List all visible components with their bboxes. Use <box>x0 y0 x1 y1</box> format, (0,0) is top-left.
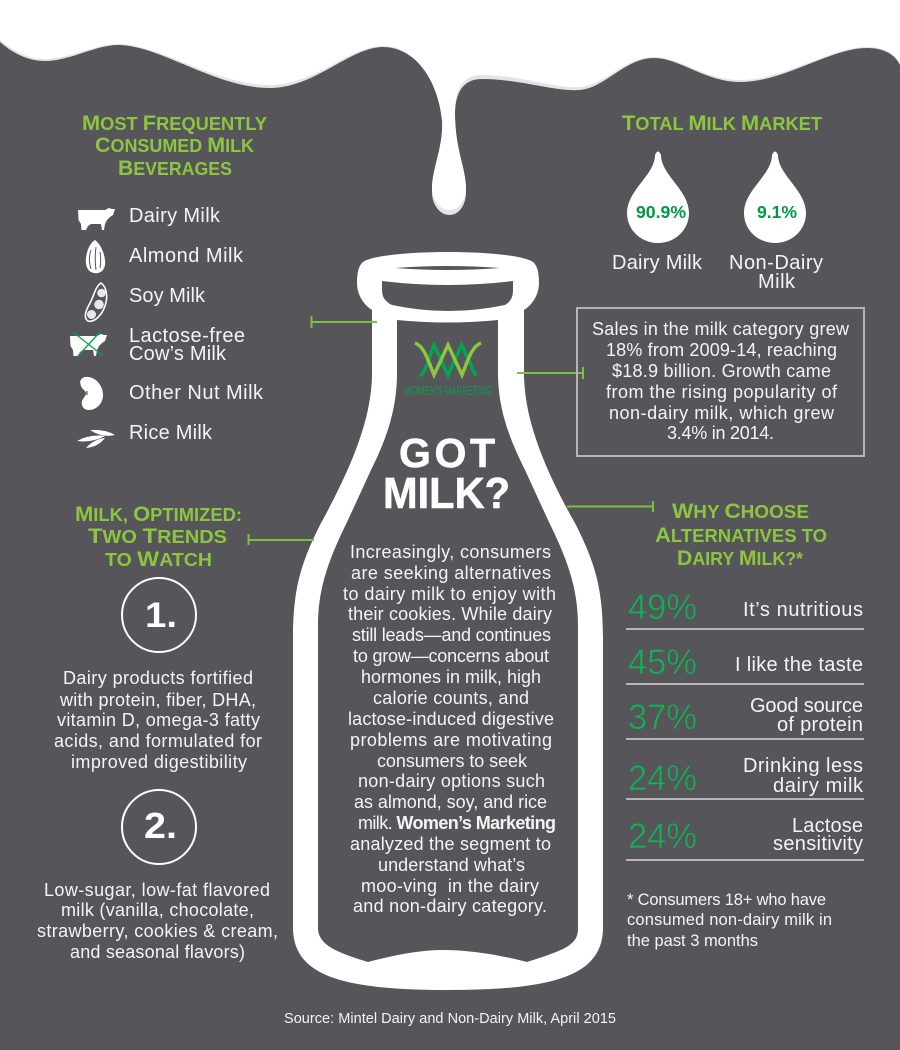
icon: cow <box>78 208 115 230</box>
text block: bottle copy: milk. Women’s Marketing <box>358 813 556 833</box>
icon: soy pod <box>85 283 107 321</box>
stat: lactose sensitivity <box>626 815 864 861</box>
heading: milk optimized <box>75 502 242 571</box>
stat: taste: 45% <box>628 643 697 682</box>
panel: sales box: Sales in the milk category grew <box>592 319 850 339</box>
icon: number one badge: 1. <box>145 596 177 635</box>
heading: why choose alternatives: WHY CHOOSE <box>672 499 809 523</box>
text block: bottle copy: Increasingly, consumers <box>350 542 551 562</box>
text block: trend one: with protein, fiber, DHA, <box>59 690 256 710</box>
icon: nut <box>80 377 103 410</box>
text block: trend two: and seasonal flavors) <box>70 942 245 962</box>
title: got milk <box>383 430 510 518</box>
panel: sales box: from the rising popularity of <box>606 382 838 402</box>
milk pouring wave at top <box>0 0 900 215</box>
stat: nutritious <box>626 588 864 630</box>
icon: number two badge <box>122 790 196 864</box>
stat: lactose sensitivity: Lactose <box>792 815 863 837</box>
logo: women's marketing: WOMEN’S MARKETING <box>404 384 492 398</box>
text block: trend one <box>54 668 262 772</box>
text block: bottle copy: moo-ving in the dairy <box>361 876 539 896</box>
text block: trend two: milk (vanilla, chocolate, <box>61 900 254 920</box>
heading: most frequently consumed: CONSUMED MILK <box>95 133 254 157</box>
text block: bottle copy: calorie counts, and <box>373 688 529 708</box>
text block: bottle copy <box>343 542 556 916</box>
text block: trend two: strawberry, cookies & cream, <box>37 921 278 941</box>
heading: most frequently consumed: BEVERAGES <box>118 156 232 180</box>
icon: almond <box>86 240 105 273</box>
heading: milk optimized: TO WATCH <box>105 547 212 571</box>
panel: sales box <box>577 308 864 456</box>
stat: drinking less dairy <box>626 755 864 800</box>
chart: dairy milk drop: Dairy Milk <box>612 252 703 274</box>
chart: non-dairy milk drop: Non-Dairy <box>729 252 823 274</box>
label: soy milk: Soy Milk <box>129 285 206 307</box>
stat: nutritious: It’s nutritious <box>743 599 863 621</box>
heading: most frequently consumed <box>82 111 267 180</box>
label: lactose-free cow's milk: Cow’s Milk <box>129 343 227 365</box>
text block: bottle copy: hormones in milk, high <box>361 667 541 687</box>
footnote <box>627 891 832 950</box>
text block: trend one: acids, and formulated for <box>54 731 262 751</box>
heading: total milk market: TOTAL MILK MARKET <box>622 111 822 135</box>
stat: taste: I like the taste <box>735 654 863 676</box>
chart: non-dairy milk drop <box>729 152 823 293</box>
stat: drinking less dairy: dairy milk <box>773 775 864 797</box>
connector: beverages to bottle <box>311 316 377 328</box>
heading: why choose alternatives: DAIRY MILK?* <box>677 546 803 570</box>
text block: bottle copy: lactose-induced digestive <box>348 709 554 729</box>
trend 1 <box>54 578 262 772</box>
text block: bottle copy: understand what’s <box>378 855 525 875</box>
text block: bottle copy: analyzed the segment to <box>350 834 551 854</box>
icon: crossed out cow <box>70 332 107 357</box>
chart: dairy milk drop <box>612 152 703 274</box>
label: rice milk: Rice Milk <box>129 422 213 444</box>
connector: bottle to why choose <box>567 501 653 512</box>
text block: trend two: Low-sugar, low-fat flavored <box>44 880 270 900</box>
heading: most frequently consumed: MOST FREQUENTLY <box>82 111 267 135</box>
panel: beverage list <box>70 205 264 448</box>
stat: nutritious: 49% <box>628 588 697 627</box>
chart: non-dairy milk drop: Milk <box>758 271 796 293</box>
panel: reasons list <box>626 588 864 861</box>
text block: bottle copy: to grow—concerns about <box>353 646 549 666</box>
title: got milk: GOT <box>399 430 495 476</box>
stat: protein: 37% <box>628 698 697 737</box>
stat: protein: of protein <box>777 714 863 736</box>
text block: bottle copy: still leads—and continues <box>352 625 551 645</box>
trend 2 <box>37 790 278 962</box>
heading: why choose alternatives: ALTERNATIVES TO <box>655 523 827 547</box>
text block: bottle copy: are seeking alternatives <box>351 563 551 583</box>
heading: milk optimized: MILK, OPTIMIZED: <box>75 502 242 526</box>
text block: trend one: improved digestibility <box>71 752 247 772</box>
stat: taste <box>626 643 864 685</box>
source line: Source: Mintel Dairy and Non-Dairy Milk, April 2015 <box>284 1011 616 1027</box>
chart: dairy milk drop: 90.9% <box>636 202 686 222</box>
text block: bottle copy: and non-dairy category. <box>353 896 547 916</box>
text block: bottle copy: problems are motivating <box>350 730 552 750</box>
text block: bottle copy: non-dairy options such <box>358 771 545 791</box>
text block: trend two <box>37 880 278 962</box>
icon: number two badge: 2. <box>144 805 177 846</box>
text block: bottle copy: as almond, soy, and rice <box>354 792 547 812</box>
label: almond milk: Almond Milk <box>129 245 244 267</box>
chart: non-dairy milk drop: 9.1% <box>757 202 797 222</box>
icon: number one badge <box>122 578 196 652</box>
stat: lactose sensitivity: 24% <box>628 817 697 856</box>
stat: protein <box>626 695 864 740</box>
label: other nut milk: Other Nut Milk <box>129 382 264 404</box>
title: got milk: MILK? <box>383 469 510 518</box>
text block: bottle copy: their cookies. While dairy <box>348 604 552 624</box>
connector: bottle to sales box <box>517 367 583 379</box>
stat: lactose sensitivity: sensitivity <box>773 833 863 855</box>
connector: two trends to bottle <box>248 534 314 545</box>
footnote: the past 3 months <box>627 932 758 950</box>
text block: trend one: Dairy products fortified <box>63 668 253 688</box>
panel: sales box: non-dairy milk, which grew <box>609 403 835 423</box>
panel: sales box: 3.4% in 2014. <box>667 423 774 443</box>
footnote: * Consumers 18+ who have <box>627 891 826 909</box>
stat: drinking less dairy: 24% <box>628 759 697 798</box>
heading: why choose alternatives <box>655 499 827 570</box>
label: lactose-free cow's milk <box>129 325 245 365</box>
logo: women's marketing <box>404 343 492 398</box>
stat: drinking less dairy: Drinking less <box>743 755 863 777</box>
icon: rice <box>77 430 115 448</box>
text block: bottle copy: consumers to seek <box>377 751 528 771</box>
text block: bottle copy: to dairy milk to enjoy with <box>343 584 556 604</box>
label: dairy milk: Dairy Milk <box>129 205 221 227</box>
panel: sales box: $18.9 billion. Growth came <box>612 361 831 381</box>
heading: milk optimized: TWO TRENDS <box>88 524 227 548</box>
text block: trend one: vitamin D, omega-3 fatty <box>57 710 260 730</box>
panel: sales box: 18% from 2009-14, reaching <box>606 340 837 360</box>
stat: protein: Good source <box>750 695 863 717</box>
footnote: consumed non-dairy milk in <box>627 911 832 929</box>
label: lactose-free cow's milk: Lactose-free <box>129 325 245 347</box>
milk bottle <box>293 252 603 990</box>
